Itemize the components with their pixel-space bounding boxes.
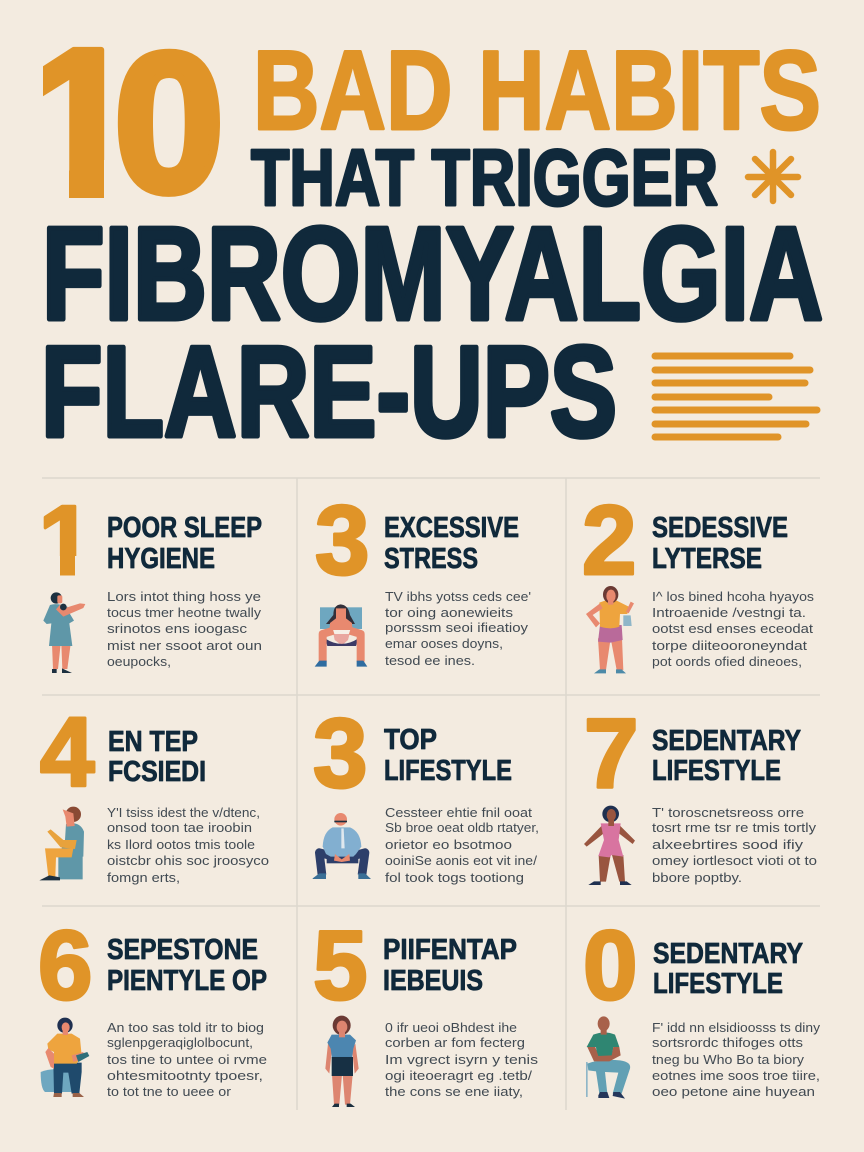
- body text: srinotos ens ioogasc: [107, 622, 247, 636]
- body text: [385, 1021, 538, 1099]
- number 4: 4: [40, 697, 95, 807]
- body text: TV ibhs yotss ceds cee': [385, 590, 531, 604]
- body text: orietor eo bsotmoo: [385, 838, 512, 852]
- panel: habit 8: [313, 910, 538, 1107]
- heading: top lifestyle: [384, 724, 512, 787]
- body text: [652, 806, 817, 885]
- panel: habit 6: [584, 698, 817, 885]
- heading: sedessive lyterse: SEDESSIVE: [652, 512, 788, 544]
- body text: pot oords ofied dineoes,: [652, 655, 802, 669]
- body text: F' idd nn elsidioosss ts diny: [652, 1021, 821, 1035]
- heading: sepestone pientyle op: [107, 934, 267, 997]
- number 3: 3: [313, 698, 368, 808]
- body text: T' toroscnetsreoss orre: [652, 806, 804, 820]
- panel: habit 5: [313, 698, 539, 885]
- title: 1: [23, 4, 140, 240]
- heading: sedentary lifestyle: [652, 725, 801, 787]
- title: FLARE-UPS: [41, 320, 617, 464]
- figure: person squatting against blue panel: [315, 604, 367, 667]
- heading: piifentap iebeuis: IEBEUIS: [383, 965, 483, 997]
- body text: Y'I tsiss idest the v/dtenc,: [107, 806, 260, 820]
- panel: habit 2: [315, 485, 531, 668]
- body text: oeupocks,: [107, 655, 171, 669]
- heading: sepestone pientyle op: SEPESTONE: [107, 934, 258, 966]
- body text: torpe diiteooroneyndat: [652, 639, 808, 653]
- body text: the cons se ene iiaty,: [385, 1085, 523, 1099]
- heading: poor sleep hygiene: HYGIENE: [107, 543, 215, 575]
- body text: sortsrordc thifoges otts: [652, 1036, 803, 1050]
- heading: top lifestyle: LIFESTYLE: [384, 755, 512, 787]
- body text: Sb broe oeat oldb rtatyer,: [385, 821, 539, 835]
- heading: sepestone pientyle op: PIENTYLE OP: [107, 965, 267, 997]
- body text: [652, 1021, 821, 1099]
- body text: omey iortlesoct vioti ot to: [652, 854, 817, 868]
- heading: top lifestyle: TOP: [384, 724, 437, 756]
- body text: fol took togs tootiong: [385, 871, 524, 885]
- number 3: 3: [315, 485, 370, 595]
- heading: piifentap iebeuis: [383, 934, 517, 997]
- icon: asterisk: [748, 152, 798, 201]
- body text: Lors intot thing hoss ye: [107, 590, 261, 604]
- number 6: 6: [38, 910, 93, 1020]
- body text: fomgn erts,: [107, 871, 180, 885]
- body text: tosrt rme tsr re tmis tortly: [652, 821, 817, 835]
- figure: woman in blue top and shorts: [325, 1016, 359, 1107]
- heading: excessive stress: [384, 512, 519, 575]
- heading: poor sleep hygiene: [107, 512, 262, 575]
- heading: en tep fcsiedi: FCSIEDI: [108, 756, 206, 788]
- figure: seated man with glasses: [313, 813, 371, 879]
- title: [43, 46, 822, 440]
- panel: habit 9: [583, 910, 821, 1099]
- heading: sedentary lifestyle: [653, 938, 803, 1000]
- heading: excessive stress: STRESS: [384, 543, 478, 575]
- body text: eotnes ime soos troe tiire,: [652, 1069, 820, 1083]
- body text: ks Ilord ootos tmis toole: [107, 838, 255, 852]
- icon: text lines: [655, 356, 817, 437]
- heading: sedentary lifestyle: LIFESTYLE: [652, 755, 781, 787]
- body text: [385, 806, 539, 885]
- heading: en tep fcsiedi: EN TEP: [108, 726, 198, 758]
- body text: emar ooses doyns,: [385, 637, 503, 651]
- body text: ooiniSe aonis eot vit ine/: [385, 854, 538, 868]
- number 5: 5: [313, 910, 368, 1020]
- body text: ogi iteoeragrt eg .tetb/: [385, 1069, 533, 1083]
- heading: excessive stress: EXCESSIVE: [384, 512, 519, 544]
- figure: man sitting on a stool: [586, 1016, 630, 1099]
- body text: ootst esd enses eceodat: [652, 622, 814, 636]
- figure: woman holding a bag: [586, 586, 634, 673]
- body text: tesod ee ines.: [385, 654, 475, 668]
- panel: habit 4: [39, 697, 269, 885]
- body text: tocus tmer heotne twally: [107, 606, 262, 620]
- body text: tos tine to untee oi rvme: [107, 1053, 267, 1067]
- body text: onsod toon tae iroobin: [107, 821, 252, 835]
- body text: oistcbr ohis soc jroosyco: [107, 854, 269, 868]
- number 2: 2: [582, 485, 637, 595]
- number 0: 0: [583, 910, 638, 1020]
- body text: [652, 590, 814, 669]
- body text: [107, 590, 262, 669]
- body text: tor oing aonewieits: [385, 606, 513, 620]
- body text: I^ los bined hcoha hyayos: [652, 590, 814, 604]
- panel: habit 7: [38, 910, 267, 1099]
- heading: piifentap iebeuis: PIIFENTAP: [383, 934, 517, 966]
- body text: ohtesmitootnty tpoesr,: [107, 1069, 263, 1083]
- heading: sedessive lyterse: [652, 512, 788, 575]
- panel: habit 3: [582, 485, 814, 673]
- figure: seated person with phone: [39, 807, 84, 880]
- title: 0: [114, 12, 224, 233]
- heading: sedentary lifestyle: SEDENTARY: [652, 725, 801, 757]
- heading: sedessive lyterse: LYTERSE: [652, 543, 762, 575]
- heading: en tep fcsiedi: [108, 726, 206, 788]
- panel: habit 1: [43, 504, 262, 673]
- body text: mist ner ssoot arot oun: [107, 639, 262, 653]
- body text: [107, 1021, 267, 1099]
- heading: sedentary lifestyle: SEDENTARY: [653, 938, 803, 970]
- body text: [385, 590, 531, 668]
- body text: porsssm seoi ifieatioy: [385, 621, 529, 635]
- body text: An too sas told itr to biog: [107, 1021, 264, 1035]
- heading: poor sleep hygiene: POOR SLEEP: [107, 512, 262, 544]
- body text: to tot tne to ueee or: [107, 1085, 231, 1099]
- body text: bbore poptby.: [652, 871, 742, 885]
- number 1: 1: [38, 485, 93, 595]
- figure: standing person in teal dress: [43, 592, 85, 673]
- body text: tneg bu Who Bo ta biory: [652, 1053, 805, 1067]
- body text: sglenpgeraqiglolbocunt,: [107, 1036, 253, 1050]
- number 7: 7: [584, 698, 639, 808]
- body text: Im vgrect isyrn y tenis: [385, 1053, 538, 1067]
- title: THAT TRIGGER: [251, 133, 718, 222]
- heading: sedentary lifestyle: LIFESTYLE: [653, 968, 783, 1000]
- body text: alxeebrtires sood ifiy: [652, 838, 804, 852]
- figure: woman in pink: [584, 806, 635, 885]
- body text: oeo petone aine huyean: [652, 1085, 815, 1099]
- figure: seated person holding a book: [41, 1018, 89, 1097]
- body text: corben ar fom fecterg: [385, 1036, 525, 1050]
- body text: [107, 806, 269, 885]
- body text: Cessteer ehtie fnil ooat: [385, 806, 533, 820]
- body text: Introaenide /vestngi ta.: [652, 606, 806, 620]
- body text: 0 ifr ueoi oBhdest ihe: [385, 1021, 517, 1035]
